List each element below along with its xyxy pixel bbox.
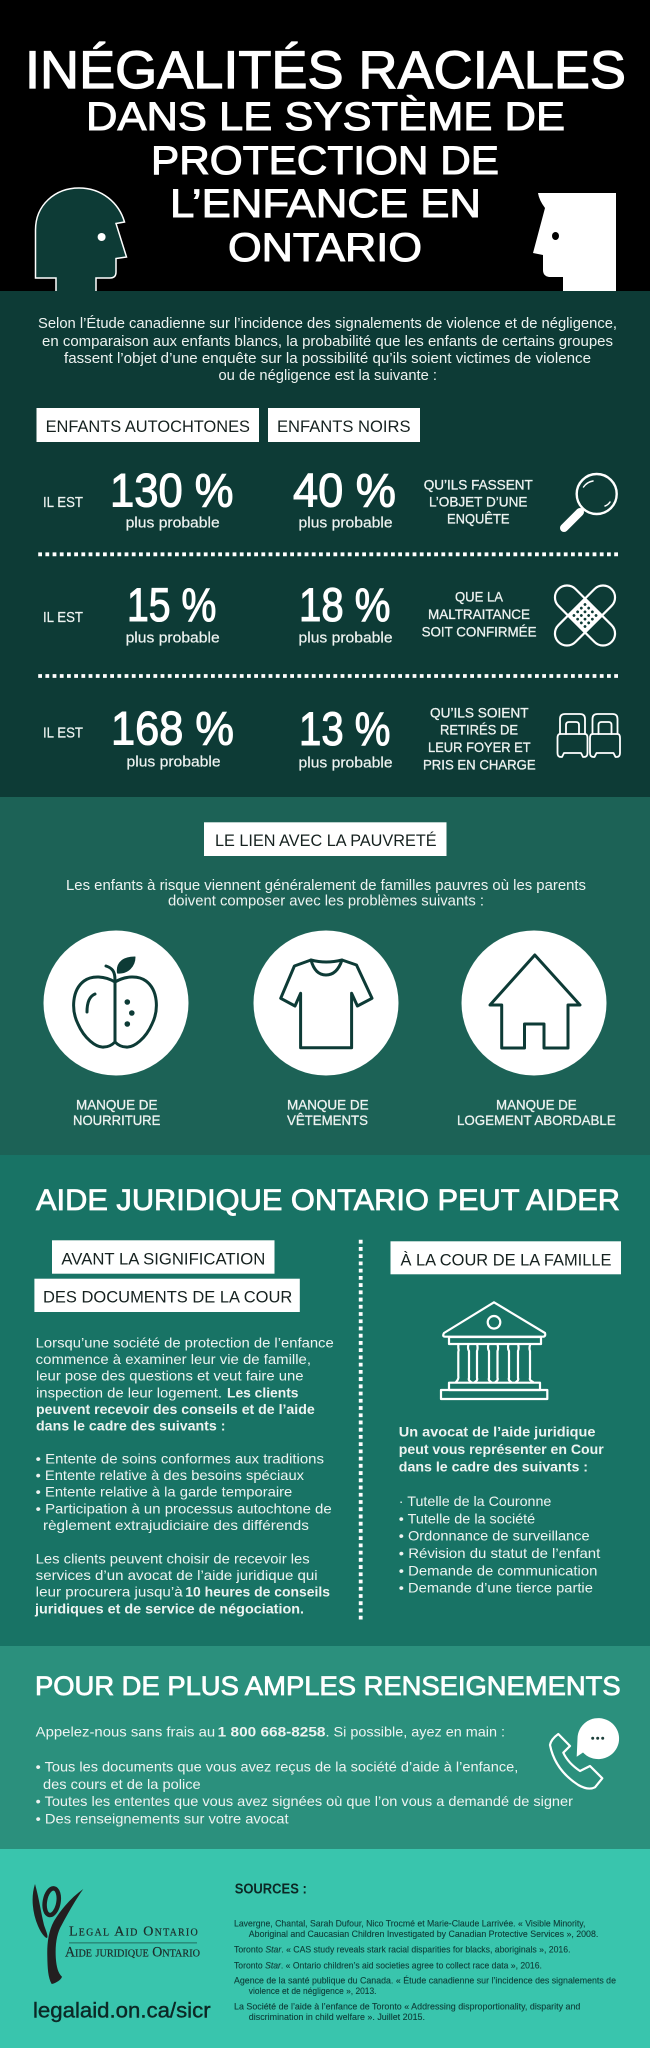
icon: house	[490, 955, 580, 1048]
text block: contact: • Tous les documents que vous avez reçus de la société d’aide à l’enfance,	[36, 1759, 518, 1775]
logo: legal aid ontario: Aide juridique Ontario	[65, 1945, 200, 1961]
heading: aide juridique ontario peut aider: AIDE JURIDIQUE ONTARIO PEUT AIDER	[36, 1184, 620, 1217]
panel: poverty link	[0, 797, 650, 1155]
row: retirés: RETIRÉS DE	[440, 722, 518, 738]
intro text	[38, 315, 617, 384]
sources list: Aboriginal and Caucasian Children Investigated by Canadian Protective Services », 2008.	[249, 1929, 598, 1939]
sources list: Toronto Star. « CAS study reveals stark racial disparities for blacks, aboriginals », 2016.	[234, 1945, 570, 1955]
title: L’ENFANCE EN	[170, 182, 481, 226]
sources list: La Société de l’aide à l’enfance de Toronto « Addressing disproportionality, disparity and	[234, 2001, 580, 2011]
panel: header	[0, 0, 650, 292]
icon: two beds	[558, 714, 620, 757]
item: manque de vêtements: VÊTEMENTS	[287, 1112, 368, 1128]
icon: magnifying glass	[564, 474, 617, 528]
text block: contact: des cours et de la police	[43, 1776, 201, 1792]
item: manque de nourriture: MANQUE DE	[76, 1096, 158, 1112]
column label: enfants autochtones: ENFANTS AUTOCHTONES	[46, 417, 250, 436]
text block: family court: • Demande de communication	[399, 1562, 597, 1578]
icon: dark head profile	[36, 188, 126, 292]
item: manque de vêtements	[254, 930, 398, 1128]
row: retirés: QU’ILS SOIENT	[430, 704, 529, 720]
row: retirés: 168 %	[111, 701, 234, 754]
text: poverty intro	[66, 878, 586, 910]
text block: family court	[399, 1424, 604, 1596]
heading: le lien avec la pauvreté: LE LIEN AVEC LA PAUVRETÉ	[215, 831, 437, 850]
sources list: Agence de la santé publique du Canada. « Étude canadienne sur l’incidence des signalements de	[234, 1976, 616, 1986]
row: retirés: plus probable	[126, 755, 221, 771]
label: des documents de la cour: DES DOCUMENTS DE LA COUR	[43, 1288, 292, 1307]
text block: family court: Un avocat de l’aide juridique	[399, 1424, 596, 1440]
sources list	[234, 1919, 616, 2022]
row: maltraitance: SOIT CONFIRMÉE	[422, 624, 536, 640]
text block: before service: juridiques et de service de négociation.	[34, 1600, 304, 1616]
text block: contact: • Toutes les ententes que vous avez signées où que l’on vous a demandé de signer	[36, 1793, 573, 1809]
icon: apple	[74, 957, 156, 1047]
row: maltraitance: IL EST	[43, 610, 83, 626]
logo: legal aid ontario: Legal Aid Ontario	[69, 1924, 198, 1940]
row: enquête: IL EST	[43, 495, 83, 511]
row: enquête: plus probable	[298, 516, 393, 532]
item: manque de logement abordable	[457, 930, 616, 1128]
item: manque de nourriture	[44, 930, 188, 1128]
row: retirés: LEUR FOYER ET	[428, 739, 531, 755]
row: retirés: IL EST	[43, 726, 83, 742]
text block: before service: Les clients	[227, 1384, 299, 1400]
text block: before service	[34, 1334, 334, 1616]
row: retirés: PRIS EN CHARGE	[423, 756, 536, 772]
heading: le lien avec la pauvreté	[204, 822, 446, 856]
label: avant la signification	[52, 1240, 274, 1274]
text block: before service: 10 heures de conseils	[185, 1584, 330, 1600]
row: enquête: 130 %	[110, 464, 234, 517]
text block: before service: peuvent recevoir des conseils et de l’aide	[36, 1401, 315, 1417]
row: enquête: QU’ILS FASSENT	[424, 476, 533, 492]
text block: before service: services d’un avocat de l’aide juridique qui	[36, 1567, 318, 1583]
text: poverty intro: doivent composer avec les problèmes suivants :	[168, 894, 484, 910]
sources list: discrimination in child welfare ». Juillet 2015.	[249, 2012, 425, 2022]
title: PROTECTION DE	[151, 139, 499, 183]
row: enquête: L’OBJET D’UNE	[429, 494, 527, 510]
icon: courthouse	[441, 1302, 547, 1399]
text block: contact: 1 800 668-8258	[218, 1724, 326, 1740]
row: maltraitance: plus probable	[298, 630, 393, 646]
row: enquête: ENQUÊTE	[447, 511, 510, 527]
row: enquête	[43, 464, 617, 532]
text block: before service: • Entente relative à la garde temporaire	[36, 1484, 293, 1500]
row: retirés	[43, 701, 620, 772]
text block: family court: · Tutelle de la Couronne	[399, 1493, 552, 1509]
row: retirés: 13 %	[299, 702, 390, 755]
text block: family court: peut vous représenter en Cour	[399, 1441, 604, 1457]
panel: footer	[0, 1849, 650, 2048]
text block: contact: . Si possible, ayez en main :	[326, 1724, 505, 1740]
text block: before service: leur procurera jusqu’à	[36, 1584, 183, 1600]
sources list: Lavergne, Chantal, Sarah Dufour, Nico Trocmé et Marie-Claude Larrivée. « Visible Minority,	[234, 1919, 585, 1929]
text block: before service: règlement extrajudiciaire des différends	[43, 1517, 309, 1533]
label: à la cour de la famille: À LA COUR DE LA FAMILLE	[400, 1250, 612, 1269]
row: maltraitance: 18 %	[299, 578, 390, 631]
item: manque de vêtements: MANQUE DE	[287, 1096, 369, 1112]
label: des documents de la cour	[34, 1279, 300, 1312]
icon: t-shirt	[281, 960, 372, 1048]
panel: more information	[0, 1646, 650, 1849]
text block: before service: leur pose des questions et veut faire une	[36, 1368, 304, 1384]
text block: before service: Les clients peuvent choisir de recevoir les	[36, 1550, 310, 1566]
text block: before service: • Entente de soins conformes aux traditions	[36, 1450, 324, 1466]
sources list: Toronto Star. « Ontario children’s aid societies agree to collect race data », 2016.	[234, 1960, 542, 1970]
column label: enfants noirs: ENFANTS NOIRS	[277, 417, 410, 436]
intro text: Selon l’Étude canadienne sur l’incidence des signalements de violence et de négligence,	[38, 315, 617, 332]
website url: legalaid.on.ca/sicr	[33, 1999, 211, 2022]
column label: enfants autochtones	[36, 408, 259, 442]
row: maltraitance: QUE LA	[455, 589, 504, 605]
text block: family court: • Ordonnance de surveillance	[399, 1528, 590, 1544]
icon: bandage	[550, 580, 620, 651]
icon: phone with speech bubble	[550, 1718, 619, 1789]
text block: before service: dans le cadre des suivants :	[36, 1418, 226, 1434]
logo: legal aid ontario	[33, 1884, 200, 1984]
heading: pour de plus amples renseignements: POUR DE PLUS AMPLES RENSEIGNEMENTS	[35, 1671, 621, 1701]
row: enquête: plus probable	[126, 516, 220, 532]
text block: contact: • Des renseignements sur votre avocat	[36, 1810, 289, 1826]
panel: statistics	[0, 291, 650, 797]
text block: family court: • Tutelle de la société	[399, 1510, 535, 1526]
text block: before service: inspection de leur logement.	[36, 1384, 222, 1400]
row: enquête: 40 %	[293, 464, 396, 517]
title	[25, 41, 626, 270]
row: retirés: plus probable	[298, 755, 393, 771]
row: maltraitance: 15 %	[127, 578, 216, 631]
label: à la cour de la famille	[390, 1241, 621, 1274]
row: maltraitance	[43, 578, 620, 651]
intro text: ou de négligence est la suivante :	[218, 368, 437, 384]
text block: before service: commence à examiner leur vie de famille,	[36, 1351, 311, 1367]
text block: before service: • Entente relative à des besoins spéciaux	[36, 1467, 304, 1483]
title: INÉGALITÉS RACIALES	[25, 41, 626, 100]
text block: family court: • Demande d’une tierce partie	[399, 1580, 593, 1596]
item: manque de nourriture: NOURRITURE	[73, 1112, 160, 1128]
intro text: fassent l’objet d’une enquête sur la possibilité qu’ils soient victimes de violence	[64, 351, 591, 367]
text block: before service: Lorsqu’une société de protection de l’enfance	[36, 1334, 334, 1350]
icon: white head profile	[533, 193, 616, 291]
column label: enfants noirs	[268, 408, 420, 442]
panel: legal aid can help	[0, 1155, 650, 1646]
item: manque de logement abordable: MANQUE DE	[496, 1096, 577, 1112]
text block: contact	[36, 1724, 573, 1826]
text block: contact: Appelez-nous sans frais au	[36, 1724, 215, 1740]
row: maltraitance: MALTRAITANCE	[428, 606, 530, 622]
title: ONTARIO	[228, 226, 422, 270]
text block: before service: • Participation à un processus autochtone de	[36, 1500, 332, 1516]
sources list: violence et de négligence », 2013.	[249, 1986, 376, 1996]
row: maltraitance: plus probable	[126, 631, 220, 647]
sources heading: SOURCES :	[235, 1881, 307, 1897]
item: manque de logement abordable: LOGEMENT ABORDABLE	[457, 1112, 616, 1128]
title: DANS LE SYSTÈME DE	[86, 94, 565, 139]
label: avant la signification: AVANT LA SIGNIFICATION	[61, 1249, 265, 1268]
text: poverty intro: Les enfants à risque viennent généralement de familles pauvres où les parents	[66, 878, 586, 894]
text block: family court: • Révision du statut de l’enfant	[399, 1545, 600, 1561]
text block: family court: dans le cadre des suivants :	[399, 1458, 588, 1474]
intro text: en comparaison aux enfants blancs, la probabilité que les enfants de certains groupes	[42, 334, 613, 350]
